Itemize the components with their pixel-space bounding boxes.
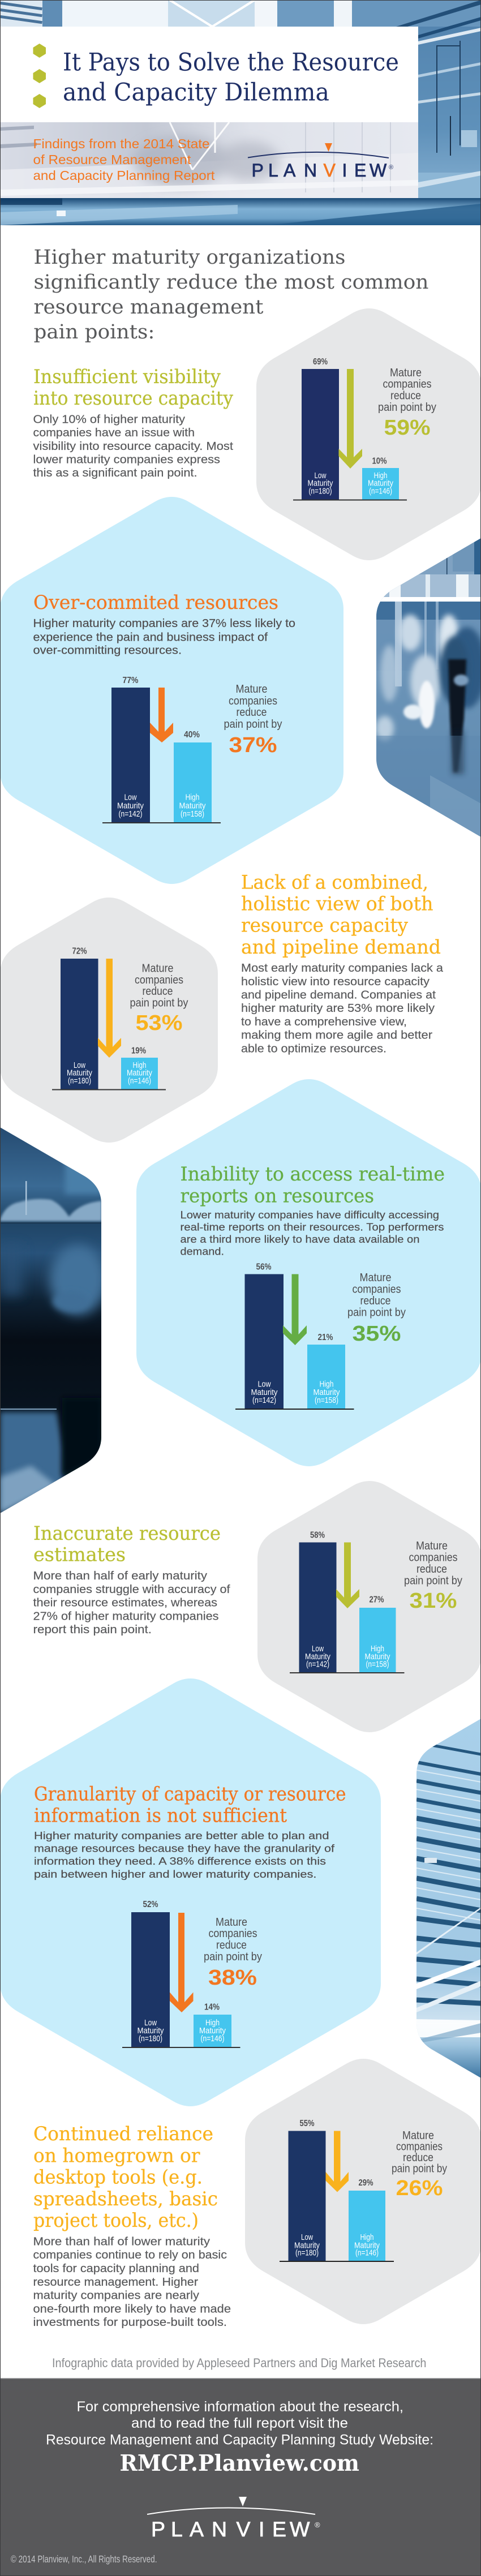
bar chart: 53% bbox=[136, 1011, 182, 1035]
body text: Lower maturity companies have difficulty accessing bbox=[180, 1209, 439, 1221]
body text: 27% of higher maturity companies bbox=[33, 1609, 218, 1623]
bar chart: reduce bbox=[416, 1562, 447, 1575]
bar chart: Low bbox=[301, 2232, 313, 2242]
bar chart: reduce bbox=[390, 389, 421, 402]
bar chart: reduce bbox=[360, 1294, 390, 1307]
bar chart: High bbox=[186, 792, 199, 802]
bar chart: 19% bbox=[131, 1046, 146, 1056]
bar chart: (n=146) bbox=[369, 487, 392, 496]
bar chart: 14% bbox=[204, 2002, 220, 2012]
bar chart: (n=142) bbox=[306, 1659, 329, 1669]
body text bbox=[33, 2235, 231, 2329]
title: and Capacity Dilemma bbox=[63, 78, 329, 106]
bar chart: companies bbox=[229, 694, 277, 707]
bar chart: 21% bbox=[318, 1333, 333, 1342]
intro heading: pain points: bbox=[34, 321, 155, 344]
heading: Lack of a combined, bbox=[241, 871, 428, 894]
heading: spreadsheets, basic bbox=[33, 2188, 218, 2210]
bar chart: Low bbox=[258, 1380, 271, 1389]
bar chart: 52% bbox=[143, 1900, 158, 1909]
heading: Continued reliance bbox=[33, 2123, 213, 2145]
bar chart bbox=[102, 676, 282, 823]
bar chart bbox=[280, 2119, 448, 2262]
bar chart: (n=142) bbox=[252, 1396, 276, 1405]
heading: Inability to access real-time bbox=[180, 1163, 445, 1186]
bar chart: Low bbox=[144, 2018, 157, 2028]
bar chart: High bbox=[205, 2018, 220, 2028]
bar chart: (n=142) bbox=[119, 809, 143, 819]
bar chart: companies bbox=[383, 377, 431, 390]
body text: companies struggle with accuracy of bbox=[33, 1583, 230, 1596]
heading: project tools, etc.) bbox=[33, 2209, 199, 2232]
bar chart: reduce bbox=[403, 2151, 433, 2164]
intro heading: resource management bbox=[34, 296, 263, 319]
bar chart: 10% bbox=[372, 456, 387, 466]
bar chart: companies bbox=[135, 973, 183, 986]
body text: resource management. Higher bbox=[33, 2276, 198, 2289]
translucent subtitle panel bbox=[0, 122, 418, 198]
bar chart: companies bbox=[352, 1282, 401, 1296]
body text bbox=[33, 413, 233, 479]
heading: information is not sufficient bbox=[34, 1804, 287, 1827]
heading bbox=[34, 1783, 346, 1827]
intro heading bbox=[34, 246, 429, 344]
bar chart: High bbox=[360, 2232, 373, 2242]
bar chart: (n=180) bbox=[309, 487, 332, 496]
body text: tools for capacity planning and bbox=[33, 2262, 199, 2275]
body text bbox=[33, 617, 295, 656]
heading: Over-commited resources bbox=[33, 591, 278, 614]
panel: granularity of capacity information bbox=[0, 1678, 381, 2106]
bar chart: (n=146) bbox=[128, 1076, 151, 1085]
bar chart: Maturity bbox=[199, 2026, 226, 2036]
grey hexagon backdrop bbox=[256, 308, 481, 560]
bar chart: 29% bbox=[359, 2178, 373, 2188]
blue hexagon backdrop bbox=[0, 1678, 381, 2106]
footer call to action: and to read the full report visit the bbox=[131, 2415, 348, 2431]
subtitle: Findings from the 2014 State bbox=[33, 136, 209, 151]
panel: over-committed resources bbox=[0, 497, 343, 884]
body text: visibility into resource capacity. Most bbox=[33, 440, 233, 453]
body text: report this pain point. bbox=[33, 1623, 152, 1636]
subtitle bbox=[33, 136, 215, 183]
bar chart: High bbox=[371, 1644, 384, 1654]
grey hexagon backdrop bbox=[245, 2059, 481, 2324]
bar chart: High bbox=[373, 471, 387, 480]
data credit: Infographic data provided by Appleseed Partners and Dig Market Research bbox=[52, 2356, 427, 2370]
bar chart: 58% bbox=[310, 1530, 325, 1540]
body text: pain between higher and lower maturity companies. bbox=[34, 1868, 317, 1880]
heading: estimates bbox=[33, 1544, 126, 1566]
heading: on homegrown or bbox=[33, 2145, 200, 2167]
heading bbox=[180, 1163, 445, 1208]
heading: desktop tools (e.g. bbox=[33, 2166, 203, 2189]
panel: lack of combined view bbox=[0, 871, 444, 1143]
bar chart: Mature bbox=[235, 682, 267, 695]
bar chart bbox=[235, 1262, 406, 1410]
panel: continued reliance on desktop tools bbox=[33, 2059, 481, 2329]
bar chart: Mature bbox=[216, 1916, 247, 1929]
body text: able to optimize resources. bbox=[241, 1042, 386, 1055]
three hexagon bullets bbox=[33, 44, 46, 108]
footer call to action: Resource Management and Capacity Planning Study Website: bbox=[46, 2432, 433, 2448]
bar chart: (n=158) bbox=[315, 1396, 338, 1405]
bar chart: Maturity bbox=[67, 1068, 92, 1077]
heading: holistic view of both bbox=[241, 893, 433, 916]
body text: maturity companies are nearly bbox=[33, 2289, 200, 2302]
panel: inaccurate resource estimates bbox=[33, 1481, 481, 1732]
bar chart: (n=146) bbox=[355, 2248, 379, 2258]
body text bbox=[34, 1830, 335, 1880]
bar chart: pain point by bbox=[392, 2162, 448, 2175]
bar chart: Mature bbox=[402, 2129, 434, 2142]
Planview white logo: ® bbox=[315, 2521, 320, 2529]
bar chart: 55% bbox=[300, 2119, 315, 2128]
bar chart: reduce bbox=[216, 1939, 247, 1951]
body text: higher maturity are 53% more likely bbox=[241, 1002, 435, 1015]
photo: blurred commuters hexagon bbox=[373, 535, 481, 840]
body text: real-time reports on their resources. Top performers bbox=[180, 1221, 444, 1233]
body text: this as a significant pain point. bbox=[33, 466, 197, 479]
body text: Higher maturity companies are better able to plan and bbox=[34, 1830, 329, 1841]
bar chart: Mature bbox=[141, 962, 173, 974]
bar chart: Maturity bbox=[137, 2026, 164, 2036]
bar chart: Maturity bbox=[294, 2241, 320, 2250]
body text: Higher maturity companies are 37% less likely to bbox=[33, 617, 295, 630]
bar chart: (n=180) bbox=[295, 2248, 319, 2258]
bar chart: 56% bbox=[256, 1262, 272, 1272]
bar chart bbox=[293, 357, 437, 500]
bar chart: 69% bbox=[313, 357, 328, 367]
bar chart: Maturity bbox=[308, 479, 333, 488]
subtitle: and Capacity Planning Report bbox=[33, 168, 215, 183]
bar chart: 35% bbox=[352, 1322, 401, 1346]
bar chart: Mature bbox=[390, 366, 422, 379]
body text: More than half of lower maturity bbox=[33, 2235, 211, 2248]
body text: are a third more likely to have data available on bbox=[180, 1233, 420, 1245]
bar chart: 26% bbox=[396, 2176, 443, 2200]
bar chart: Mature bbox=[360, 1271, 392, 1284]
bar chart: Low bbox=[124, 792, 137, 802]
Planview white logo: PLANVIEW bbox=[151, 2517, 310, 2541]
bar chart: Maturity bbox=[251, 1388, 278, 1397]
bar chart bbox=[290, 1530, 463, 1673]
body text: companies continue to rely on basic bbox=[33, 2248, 227, 2261]
header banner bbox=[0, 0, 481, 225]
bar chart: Low bbox=[74, 1061, 85, 1070]
Planview logo: PLAN V IEW bbox=[251, 160, 387, 181]
body text: experience the pain and business impact of bbox=[33, 630, 268, 644]
bar chart: 59% bbox=[384, 416, 430, 440]
bar chart: companies bbox=[396, 2140, 443, 2153]
body text: demand. bbox=[180, 1245, 224, 1257]
blue hexagon backdrop bbox=[136, 1079, 481, 1466]
body text: to have a comprehensive view, bbox=[241, 1015, 407, 1028]
bar chart: (n=180) bbox=[68, 1076, 91, 1085]
body text: companies have an issue with bbox=[33, 426, 195, 439]
subtitle: of Resource Management bbox=[33, 152, 191, 167]
bar chart: High bbox=[319, 1380, 334, 1389]
heading bbox=[241, 871, 441, 959]
bar chart: pain point by bbox=[204, 1950, 263, 1963]
bar chart: (n=158) bbox=[366, 1659, 389, 1669]
bar chart: companies bbox=[208, 1927, 257, 1940]
heading bbox=[33, 366, 234, 410]
body text: holistic view into resource capacity bbox=[241, 975, 430, 988]
bar chart: reduce bbox=[143, 985, 173, 998]
bar chart: pain point by bbox=[404, 1574, 463, 1587]
bar chart: 40% bbox=[184, 730, 200, 740]
body text: over-committing resources. bbox=[33, 644, 182, 656]
footer call to action bbox=[46, 2399, 433, 2448]
bar chart: pain point by bbox=[130, 996, 188, 1010]
body text: and pipeline demand. Companies at bbox=[241, 988, 436, 1002]
bar chart: 31% bbox=[410, 1589, 457, 1613]
bar chart bbox=[52, 946, 188, 1090]
bar chart: High bbox=[132, 1061, 146, 1070]
heading: resource capacity bbox=[241, 915, 409, 937]
footer bbox=[0, 2378, 481, 2576]
intro heading: Higher maturity organizations bbox=[34, 246, 346, 269]
bar chart: (n=180) bbox=[139, 2034, 162, 2043]
bar chart: Low bbox=[312, 1644, 324, 1654]
heading: into resource capacity bbox=[33, 387, 234, 410]
bar chart: Mature bbox=[416, 1539, 448, 1552]
panel: insufficient visibility bbox=[33, 308, 481, 560]
body text: More than half of early maturity bbox=[33, 1569, 208, 1582]
panel: inability to access real-time reports bbox=[136, 1079, 481, 1466]
body text: one-fourth more likely to have made bbox=[33, 2302, 231, 2316]
body text: information they need. A 38% difference exists on this bbox=[34, 1855, 326, 1867]
title bbox=[63, 49, 399, 106]
bar chart: Maturity bbox=[117, 801, 144, 810]
bar chart bbox=[122, 1900, 263, 2048]
bar chart: Maturity bbox=[179, 801, 206, 810]
bar chart: Maturity bbox=[313, 1388, 340, 1397]
body text bbox=[241, 961, 444, 1055]
bar chart: 77% bbox=[122, 676, 139, 685]
Planview logo bbox=[248, 143, 393, 181]
body text bbox=[33, 1569, 230, 1636]
photo: building louvres hexagon bbox=[413, 1715, 481, 2083]
body text: investments for purpose-built tools. bbox=[33, 2316, 227, 2329]
bar chart: Maturity bbox=[368, 479, 393, 488]
body text: manage resources because they have the granularity of bbox=[34, 1843, 335, 1854]
bar chart: 37% bbox=[229, 733, 277, 757]
bar chart: pain point by bbox=[378, 401, 437, 414]
website URL: RMCP.Planview.com bbox=[120, 2450, 359, 2476]
Planview white logo bbox=[147, 2497, 320, 2541]
bar chart: (n=146) bbox=[200, 2034, 224, 2043]
header photo: city skyline bbox=[0, 0, 481, 225]
bar chart: Low bbox=[315, 471, 327, 480]
bar chart: 38% bbox=[208, 1966, 257, 1990]
bar chart: pain point by bbox=[224, 718, 282, 731]
photo: dark motion-blur hexagon bbox=[0, 1123, 108, 1517]
body text bbox=[180, 1209, 444, 1257]
title: It Pays to Solve the Resource bbox=[63, 49, 399, 77]
body text: Most early maturity companies lack a bbox=[241, 961, 444, 974]
blue hexagon backdrop bbox=[0, 497, 343, 884]
copyright: © 2014 Planview, Inc., All Rights Reserved. bbox=[11, 2553, 157, 2565]
heading: Inaccurate resource bbox=[33, 1522, 221, 1545]
bar chart: pain point by bbox=[347, 1306, 406, 1319]
footer call to action: For comprehensive information about the research, bbox=[77, 2399, 403, 2415]
Planview logo: ® bbox=[389, 164, 393, 171]
grey hexagon backdrop bbox=[257, 1481, 481, 1732]
bar chart: Maturity bbox=[305, 1652, 330, 1661]
bar chart: companies bbox=[409, 1551, 457, 1564]
bar chart: reduce bbox=[237, 706, 267, 719]
bar chart: (n=158) bbox=[181, 809, 204, 819]
heading: Insufficient visibility bbox=[33, 366, 221, 388]
bar chart: Maturity bbox=[127, 1068, 152, 1077]
heading: Granularity of capacity or resource bbox=[34, 1783, 346, 1805]
grey hexagon backdrop bbox=[0, 898, 218, 1143]
bar chart: Maturity bbox=[354, 2241, 380, 2250]
body text: making them more agile and better bbox=[241, 1029, 432, 1041]
heading: and pipeline demand bbox=[241, 936, 441, 959]
body text: their resource estimates, whereas bbox=[33, 1596, 217, 1609]
white title panel bbox=[0, 27, 418, 122]
bar chart: 72% bbox=[72, 946, 87, 956]
body text: lower maturity companies express bbox=[33, 453, 220, 466]
bar chart: 27% bbox=[369, 1595, 384, 1605]
heading bbox=[33, 1522, 221, 1566]
heading: reports on resources bbox=[180, 1185, 374, 1208]
bar chart: Maturity bbox=[364, 1652, 390, 1661]
intro heading: significantly reduce the most common bbox=[34, 271, 429, 294]
heading bbox=[33, 2123, 218, 2232]
body text: Only 10% of higher maturity bbox=[33, 413, 186, 426]
